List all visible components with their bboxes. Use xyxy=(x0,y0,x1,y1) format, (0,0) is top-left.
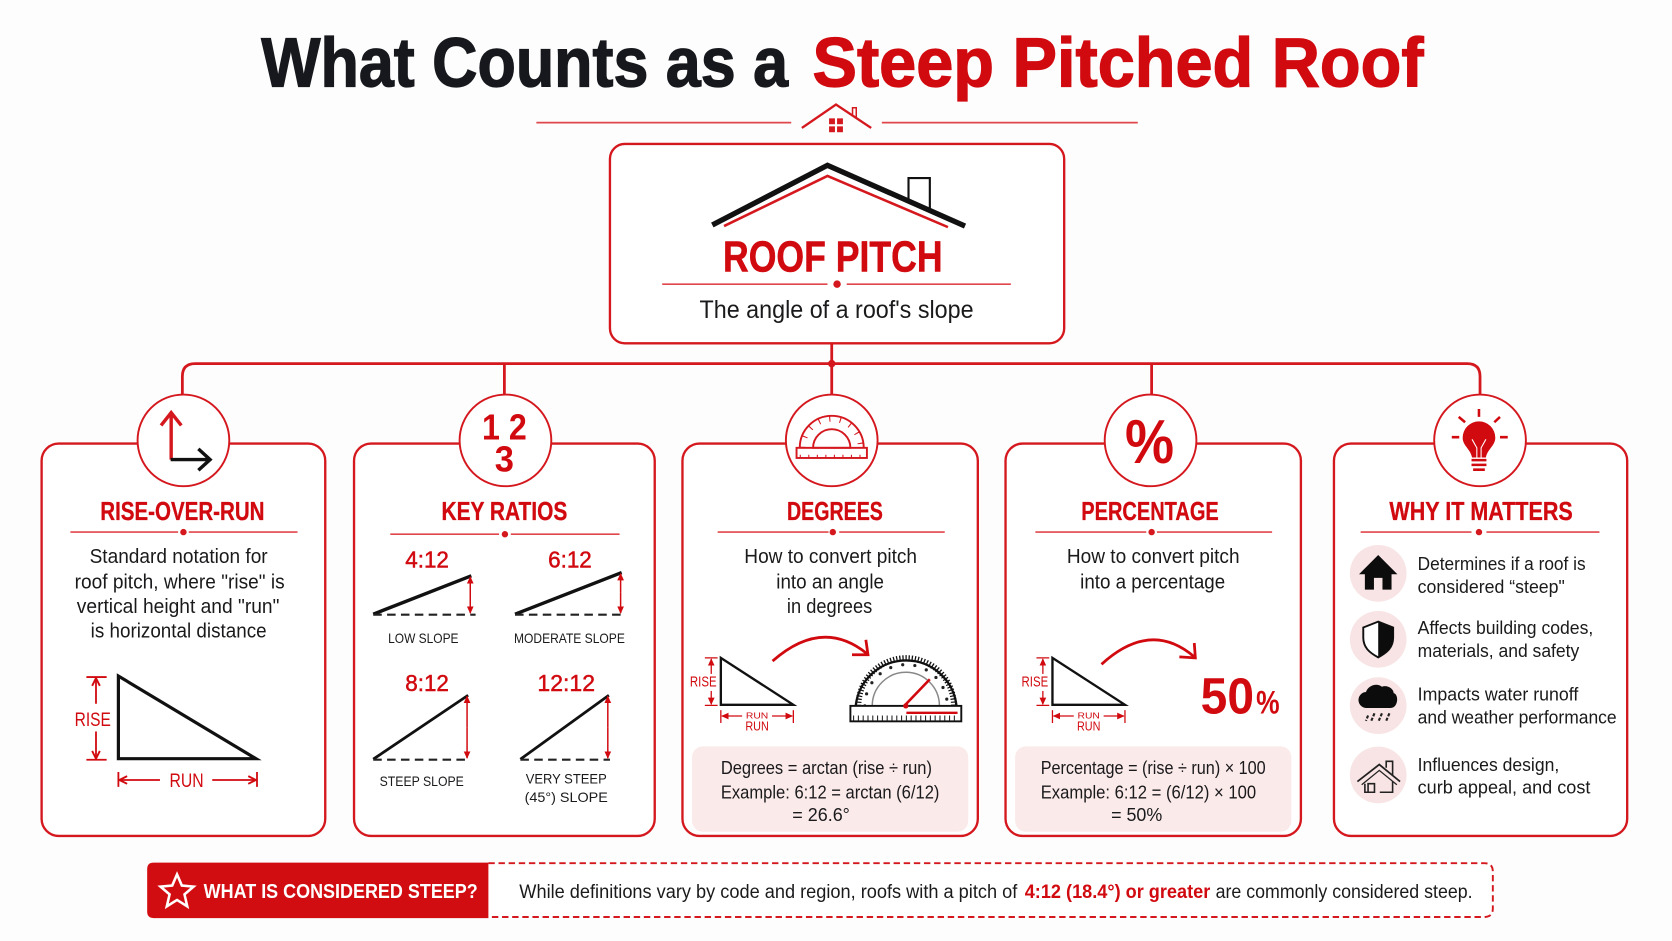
rise-over-run description: is horizontal distance xyxy=(91,621,267,643)
roof pitch subtitle: The angle of a roof's slope xyxy=(700,297,974,324)
ratio 4:12 low slope: LOW SLOPE xyxy=(388,630,459,646)
panel: percentage xyxy=(1006,395,1301,836)
percentage formula box: Example: 6:12 = (6/12) × 100 xyxy=(1041,783,1256,803)
heading: percentage: PERCENTAGE xyxy=(1081,496,1219,526)
degrees description: into an angle xyxy=(776,572,884,594)
item: design and cost: curb appeal, and cost xyxy=(1418,777,1591,798)
icon: light bulb xyxy=(1434,395,1526,486)
ratio 12:12 very steep slope xyxy=(520,670,610,805)
rise and run triangle diagram xyxy=(75,676,257,792)
rise and run triangle diagram: RUN xyxy=(170,771,204,792)
small rise and run triangle: RUN xyxy=(1077,718,1100,733)
degrees description: How to convert pitch xyxy=(744,546,917,568)
icon: star xyxy=(161,874,194,906)
percentage description xyxy=(1067,546,1240,594)
ratio 6:12 moderate slope: 6:12 xyxy=(548,546,592,572)
item: determines steepness: considered “steep" xyxy=(1418,576,1565,597)
icon: numbers 1 2 3: 3 xyxy=(495,438,514,479)
title: Steep Pitched Roof xyxy=(813,23,1424,101)
item: building codes xyxy=(1350,611,1593,668)
tree connector lines xyxy=(182,343,1480,397)
item: determines steepness xyxy=(1350,545,1586,602)
title xyxy=(261,23,1424,101)
item: water runoff: and weather performance xyxy=(1418,706,1617,727)
ratio 8:12 steep slope xyxy=(373,670,469,789)
ratio 8:12 steep slope: STEEP SLOPE xyxy=(380,773,464,789)
protractor gauge xyxy=(850,658,961,721)
rise-over-run description xyxy=(75,546,285,643)
icon: percent sign xyxy=(1105,395,1196,486)
heading: degrees: DEGREES xyxy=(787,496,883,526)
panel: rise-over-run xyxy=(42,395,325,836)
heading: roof pitch: ROOF PITCH xyxy=(723,232,943,281)
heading: key ratios: KEY RATIOS xyxy=(441,496,567,526)
small rise and run triangle: RISE xyxy=(1022,675,1048,691)
item: building codes: Affects building codes, xyxy=(1418,617,1593,638)
rise and run triangle diagram: RISE xyxy=(75,710,111,731)
degrees formula box: = 26.6° xyxy=(792,805,850,825)
ratio 8:12 steep slope: 8:12 xyxy=(405,670,449,696)
panel: key ratios xyxy=(354,395,655,836)
degrees description: in degrees xyxy=(787,596,872,618)
arrow: triangle to gauge xyxy=(773,637,868,661)
degrees formula box: Degrees = arctan (rise ÷ run) xyxy=(721,758,932,778)
heading: rise-over-run: RISE-OVER-RUN xyxy=(100,496,264,526)
panel: degrees xyxy=(682,395,978,836)
result: 50 percent: % xyxy=(1256,684,1280,720)
item: water runoff xyxy=(1350,677,1617,734)
icon: percent sign: % xyxy=(1125,408,1174,477)
item: design and cost xyxy=(1350,747,1591,803)
callout text: 4:12 (18.4°) or greater xyxy=(1025,882,1211,903)
percentage formula box: Percentage = (rise ÷ run) × 100 xyxy=(1041,758,1266,778)
degrees formula box: Example: 6:12 = arctan (6/12) xyxy=(721,783,939,803)
percentage formula box xyxy=(1015,746,1291,832)
heading: why it matters: WHY IT MATTERS xyxy=(1389,496,1573,526)
degrees formula box xyxy=(692,746,968,832)
ratio 12:12 very steep slope: 12:12 xyxy=(537,670,595,696)
small rise and run triangle: RISE xyxy=(690,675,717,691)
rise-over-run description: roof pitch, where "rise" is xyxy=(75,572,285,594)
item: determines steepness: Determines if a roof is xyxy=(1418,553,1586,574)
icon: numbers 1 2 3 xyxy=(460,395,551,486)
small rise and run triangle: RUN xyxy=(746,711,769,720)
percentage description: How to convert pitch xyxy=(1067,546,1240,568)
small rise and run triangle: RUN xyxy=(745,718,769,733)
percentage description: into a percentage xyxy=(1080,572,1225,594)
item: building codes: materials, and safety xyxy=(1418,640,1580,661)
callout text: While definitions vary by code and region, roofs with a pitch of xyxy=(519,882,1018,903)
result: 50 percent: 50 xyxy=(1201,667,1254,724)
small rise and run triangle xyxy=(1022,658,1125,733)
icon: rise and run arrows xyxy=(138,395,229,486)
callout text: are commonly considered steep. xyxy=(1216,882,1473,903)
percentage formula box: = 50% xyxy=(1111,805,1162,825)
item: design and cost: Influences design, xyxy=(1418,754,1559,775)
small rise and run triangle: RUN xyxy=(1078,711,1100,720)
icon: numbers 1 2 3: 1 2 xyxy=(482,406,527,447)
ratio 12:12 very steep slope: (45°) SLOPE xyxy=(525,789,608,805)
icon: roof outline xyxy=(712,165,965,227)
ratio 4:12 low slope xyxy=(373,546,476,646)
ratio 4:12 low slope: 4:12 xyxy=(405,546,449,572)
degrees description xyxy=(744,546,917,618)
ratio 12:12 very steep slope: VERY STEEP xyxy=(526,771,607,787)
small rise and run triangle xyxy=(690,658,793,733)
rise-over-run description: vertical height and "run" xyxy=(77,596,279,618)
rise-over-run description: Standard notation for xyxy=(90,546,268,568)
ratio 6:12 moderate slope: MODERATE SLOPE xyxy=(514,630,625,646)
icon: title divider with house xyxy=(536,104,1138,132)
callout: what is considered steep xyxy=(147,863,1493,918)
panel: why it matters xyxy=(1334,395,1627,836)
ratio 6:12 moderate slope xyxy=(514,546,625,646)
arrow: triangle to result xyxy=(1102,640,1195,664)
icon: protractor xyxy=(786,395,878,486)
title: What Counts as a xyxy=(261,23,788,101)
item: water runoff: Impacts water runoff xyxy=(1418,684,1579,705)
callout text xyxy=(519,882,1473,903)
callout label: WHAT IS CONSIDERED STEEP? xyxy=(204,881,478,903)
panel: roof pitch xyxy=(610,144,1064,343)
